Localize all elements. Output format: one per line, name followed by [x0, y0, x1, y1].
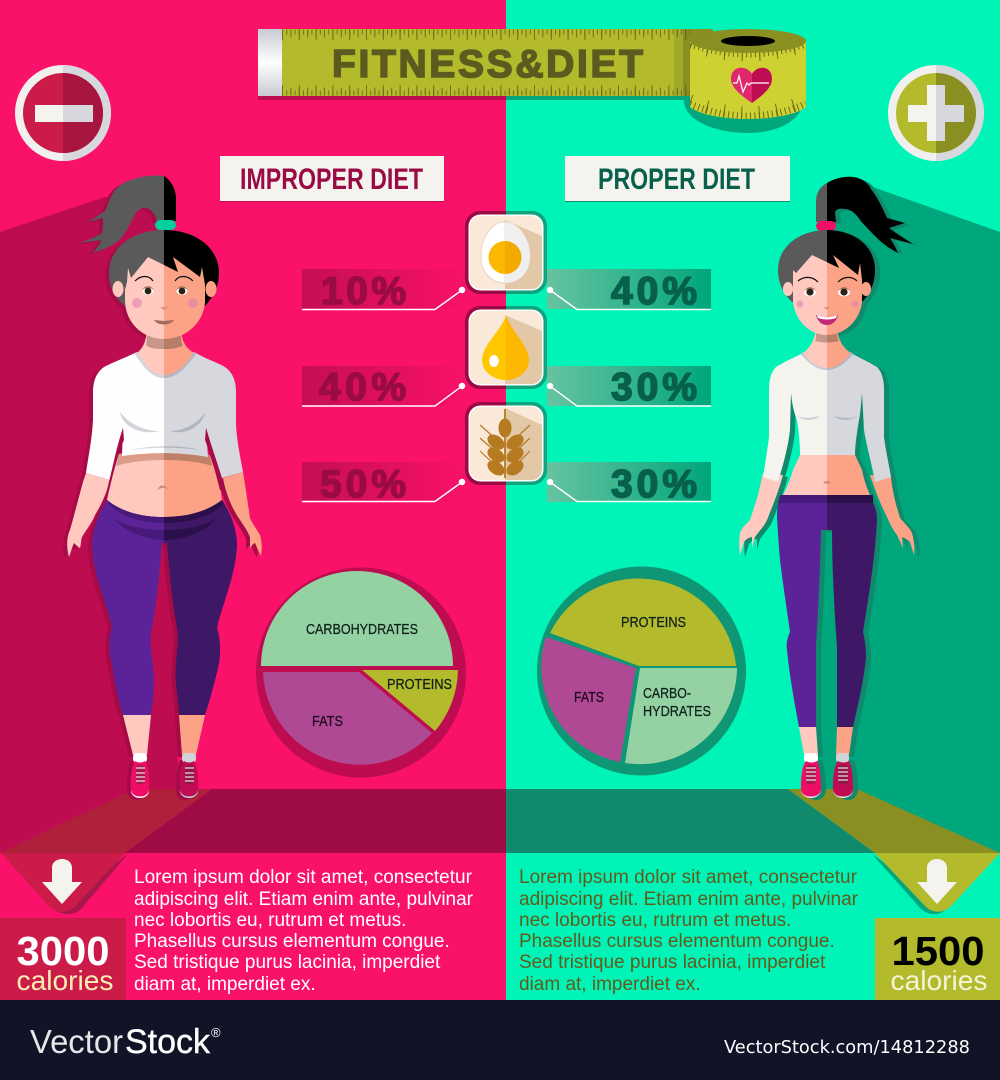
navel	[824, 482, 830, 483]
proteins share 40%: 40%	[611, 270, 697, 313]
ears	[783, 282, 793, 296]
carbohydrates share 30%: 30%	[611, 463, 697, 506]
footer logo: ®	[211, 1025, 221, 1040]
carbohydrates share 30%	[547, 462, 711, 506]
pie labels: CARBOHYDRATES	[306, 622, 418, 638]
navel	[158, 486, 168, 490]
text block: proper diet description: diam at, imperdiet ex.	[519, 974, 701, 995]
text block: proper diet description: Lorem ipsum dolor sit amet, consectetur	[519, 867, 858, 888]
callout: 3000 calories: calories	[16, 965, 114, 996]
long shadow: right figure	[805, 186, 1000, 853]
lower legs	[799, 727, 853, 755]
floor band: right	[506, 789, 875, 853]
mouth	[154, 320, 174, 324]
figure: woman on improper diet	[63, 175, 262, 800]
shoes	[801, 790, 853, 798]
eyes	[804, 288, 816, 296]
text block: proper diet description: Sed tristique purus lacinia, imperdiet	[519, 952, 826, 973]
slice: carbohydrates	[625, 668, 737, 764]
cheeks	[132, 298, 142, 308]
neck	[137, 330, 194, 377]
footer logo	[30, 1023, 221, 1061]
face	[793, 255, 862, 335]
ponytail	[816, 177, 913, 253]
proteins share 10%	[302, 269, 466, 313]
pie chart: proper diet: FATS	[574, 690, 604, 706]
footer bar	[0, 1000, 1000, 1080]
callout: 1500 calories	[875, 918, 1000, 1000]
heading: improper diet	[220, 156, 444, 202]
title text: FITNESS&DIET	[332, 43, 643, 86]
slice: proteins	[550, 578, 736, 666]
tape metal end	[258, 29, 282, 96]
ponytail	[78, 175, 176, 253]
icon: plus badge	[888, 65, 984, 161]
text block: improper diet description: Sed tristique purus lacinia, imperdiet	[134, 952, 441, 973]
comparison bars: proper diet percentages	[547, 269, 711, 506]
text block: proper diet description: nec lobortis eu, rutrum et metus.	[519, 910, 791, 931]
callout: 1500 calories: 1500	[892, 928, 984, 974]
pie chart: proper diet	[537, 566, 746, 776]
pie chart: proper diet: CARBO-	[643, 686, 691, 702]
ears	[112, 281, 124, 297]
tape roll shadow	[684, 100, 803, 133]
floor band: left	[125, 789, 506, 853]
leggings	[92, 500, 237, 715]
face	[125, 257, 205, 339]
callout: 1500 calories: calories	[890, 965, 988, 996]
proteins share 40%	[547, 269, 711, 313]
icon: oil drop tile	[465, 306, 547, 389]
arm gap shadow	[107, 428, 222, 490]
background: improper diet side	[0, 0, 506, 1000]
nose	[160, 307, 169, 310]
carbohydrates share 50%	[302, 462, 466, 506]
text block: proper diet description: adipiscing elit. Etiam enim ante, pulvinar	[519, 889, 859, 910]
figure flat shadow	[744, 179, 919, 800]
footer logo: Stock	[125, 1023, 211, 1061]
text block: proper diet description: Phasellus cursus elementum congue.	[519, 931, 835, 952]
tape ticks	[282, 32, 690, 93]
pie chart: proper diet: HYDRATES	[643, 704, 711, 720]
smile	[816, 315, 838, 325]
fats share 30%: 30%	[611, 366, 697, 409]
title: measuring tape banner	[258, 29, 806, 133]
tape strip	[282, 29, 692, 96]
pie chart: improper diet	[256, 568, 466, 778]
footer image id: VectorStock.com/14812288	[724, 1037, 970, 1058]
icon: heart with pulse	[731, 68, 772, 103]
arms	[739, 473, 914, 555]
figure flat shadow	[63, 177, 258, 800]
pie chart: improper diet: PROTEINS	[387, 677, 452, 693]
neck	[803, 328, 851, 369]
fats share 30%	[547, 366, 711, 409]
text block: improper diet description: adipiscing elit. Etiam enim ante, pulvinar	[134, 889, 474, 910]
eyes	[142, 287, 154, 295]
text block: improper diet description: nec lobortis eu, rutrum et metus.	[134, 910, 406, 931]
heading: proper diet: PROPER DIET	[598, 163, 755, 196]
floor light: left	[0, 789, 212, 853]
lower legs	[123, 715, 205, 755]
text block: improper diet description: Phasellus cursus elementum congue.	[134, 931, 450, 952]
nose	[823, 307, 831, 310]
socks	[804, 753, 818, 763]
slice: fats	[541, 637, 636, 762]
tape roll top	[690, 29, 806, 53]
hair	[109, 230, 219, 306]
hair tie	[155, 220, 176, 230]
arrow: left down arrow badge	[1, 853, 128, 914]
icon: minus badge	[15, 65, 111, 161]
slice: fats	[263, 672, 432, 765]
icon: wheat tile	[465, 402, 547, 485]
arms	[67, 472, 262, 557]
fats share 40%: 40%	[319, 366, 406, 409]
text block: proper diet description	[519, 867, 859, 995]
slice: proteins	[362, 670, 458, 731]
footer logo: Vector	[30, 1023, 123, 1060]
tape roll body	[690, 41, 806, 119]
cheeks	[796, 300, 804, 308]
pie chart: improper diet: FATS	[312, 714, 343, 730]
heading: improper diet: IMPROPER DIET	[240, 163, 423, 196]
comparison bars: improper diet percentages	[302, 269, 466, 506]
callout: 3000 calories	[0, 918, 126, 1000]
callout: 3000 calories: 3000	[16, 928, 110, 974]
floor light: right	[788, 789, 1000, 853]
socks	[133, 753, 147, 763]
proteins share 10%: 10%	[321, 270, 406, 313]
heading: proper diet	[565, 156, 790, 202]
slice: carbohydrates	[261, 571, 453, 666]
text block: improper diet description: diam at, imperdiet ex.	[134, 974, 316, 995]
pie labels: PROTEINS	[621, 615, 686, 631]
arrow: right down arrow badge	[872, 853, 1000, 914]
shirt	[763, 353, 891, 482]
hair	[778, 230, 875, 302]
leggings	[777, 495, 877, 727]
shirt	[86, 352, 243, 480]
background: proper diet side	[506, 0, 1000, 1000]
midriff	[783, 455, 870, 495]
tape roll ticks	[690, 45, 806, 116]
tape shadow	[258, 96, 506, 100]
text block: improper diet description: Lorem ipsum dolor sit amet, consectetur	[134, 867, 473, 888]
figure: woman on proper diet	[739, 177, 919, 800]
fats share 40%	[302, 366, 466, 409]
long shadow: left figure	[0, 197, 178, 853]
hair tie	[816, 221, 836, 231]
belly	[107, 455, 222, 517]
icon: egg tile	[465, 211, 547, 294]
shoes	[131, 790, 149, 798]
carbohydrates share 50%: 50%	[320, 463, 406, 506]
text block: improper diet description	[134, 867, 474, 995]
